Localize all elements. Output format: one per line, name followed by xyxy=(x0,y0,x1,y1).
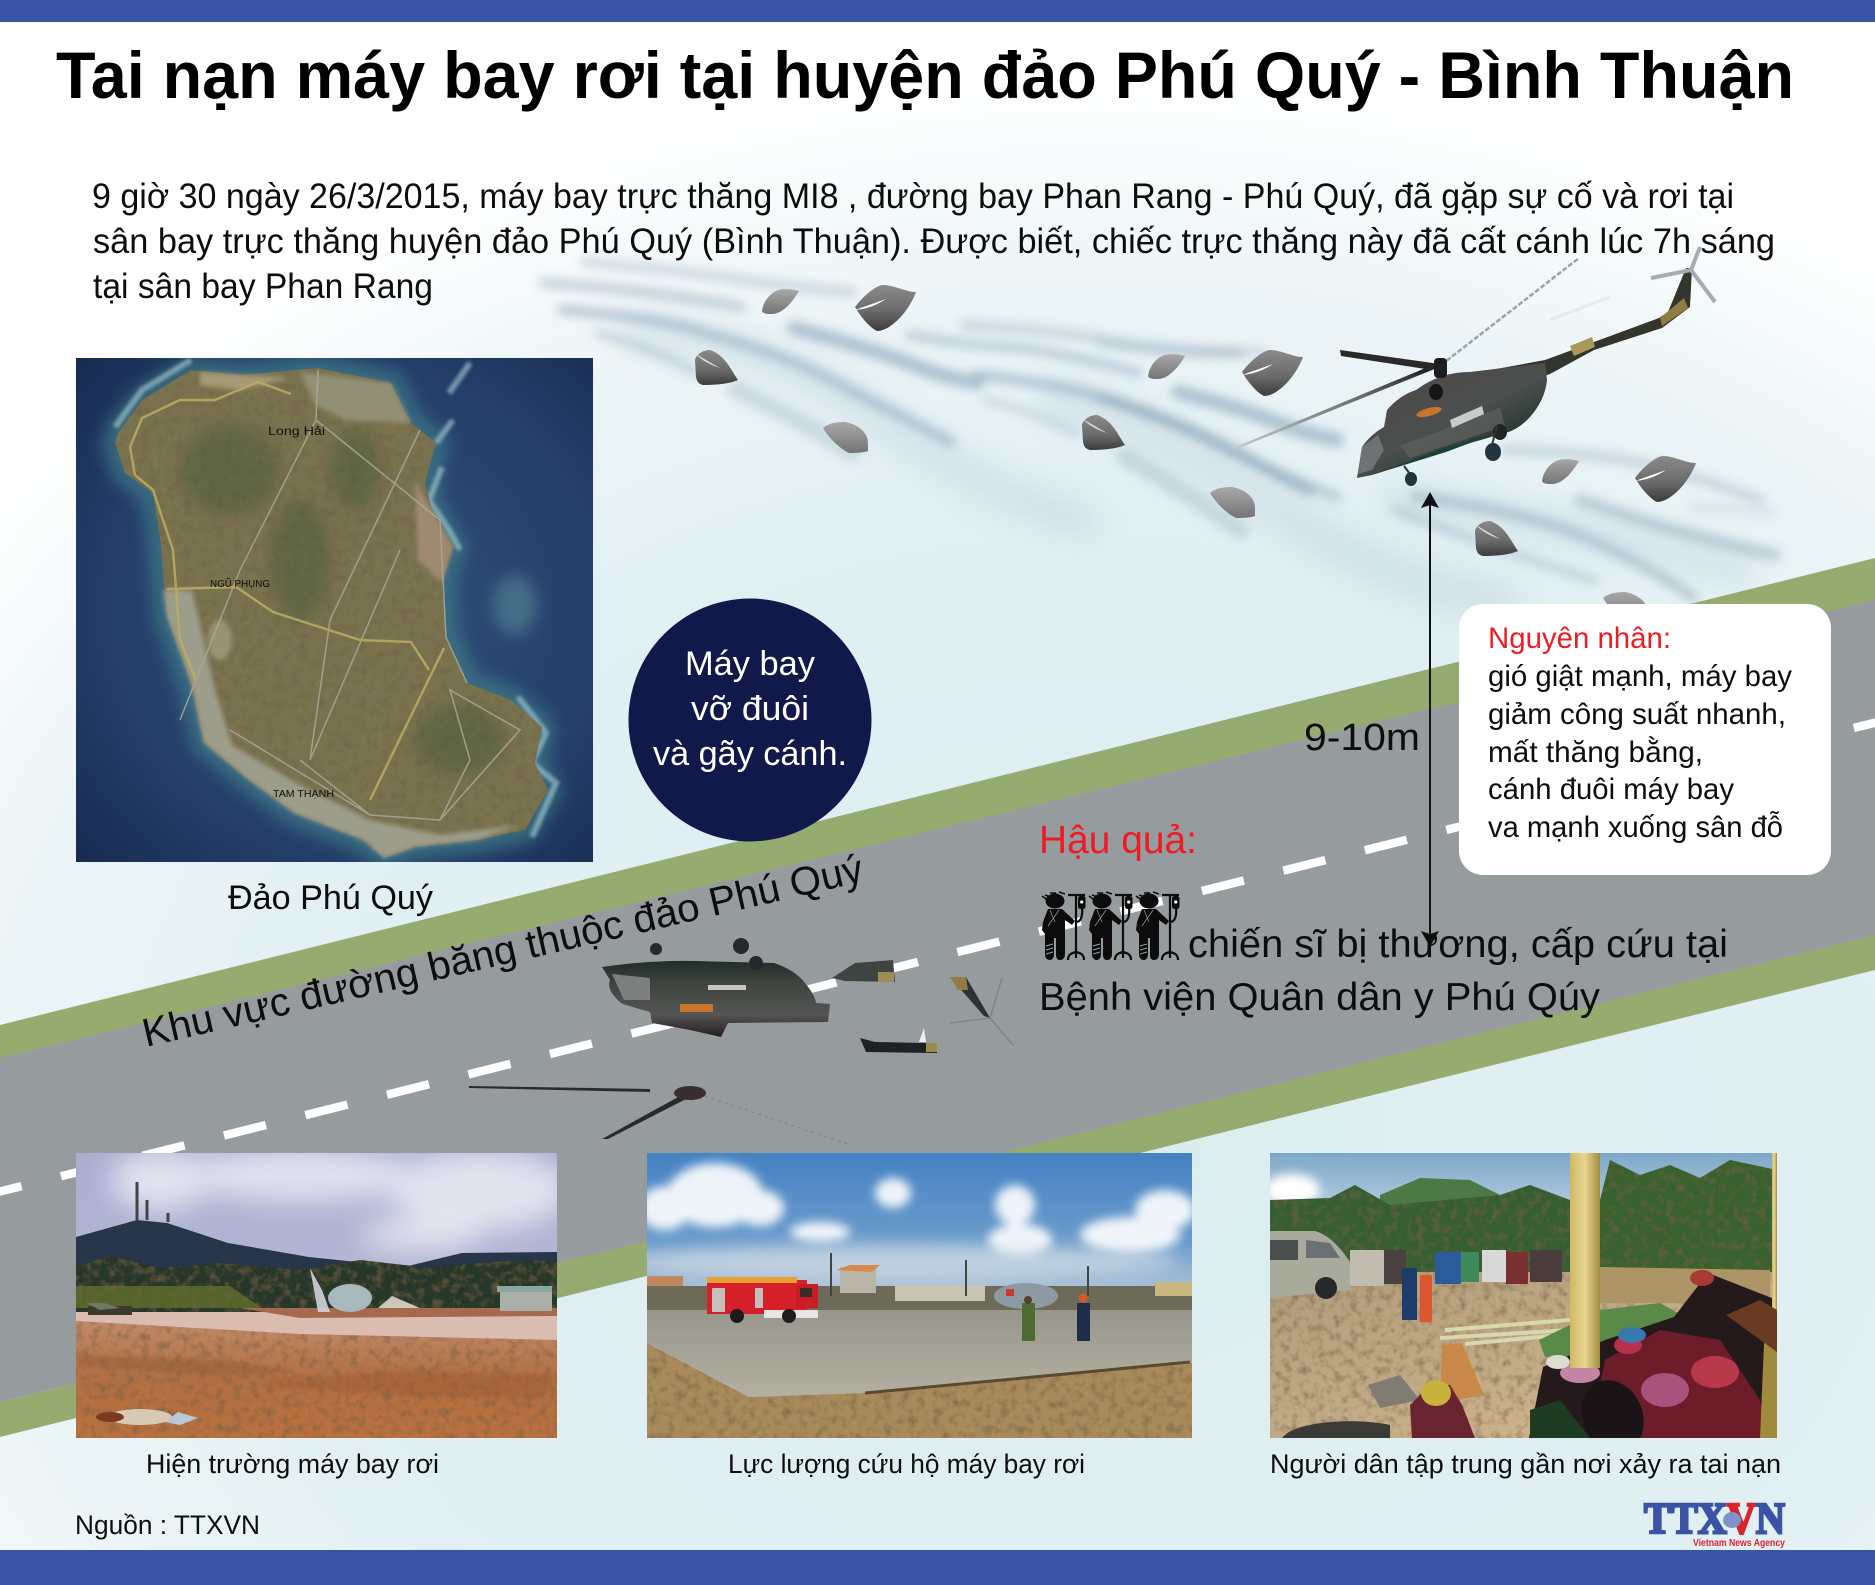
rotor hub xyxy=(1434,358,1447,378)
callout: cause: va mạnh xuống sân đỗ xyxy=(1488,811,1783,844)
callout: cause xyxy=(1459,604,1831,875)
shed xyxy=(500,1290,552,1311)
wreck body xyxy=(602,961,830,1037)
orange emblem xyxy=(1415,405,1443,419)
bottom bar xyxy=(0,1550,1875,1585)
helicopter on apron xyxy=(994,1283,1058,1309)
bench rail xyxy=(1726,1300,1777,1352)
title: Tai nạn máy bay rơi tại huyện đảo Phú Quý - Bình Thuận xyxy=(56,38,1794,112)
green lower verge xyxy=(0,935,1875,1437)
callout: cause: cánh đuôi máy bay xyxy=(1488,773,1734,806)
seated crowd xyxy=(1529,1273,1777,1438)
soft haze under streaks xyxy=(640,330,1740,600)
tree line xyxy=(76,1256,557,1312)
callout: cause: Nguyên nhân: xyxy=(1488,622,1671,655)
parked helicopter xyxy=(88,1306,132,1315)
height label: 9-10m xyxy=(1304,717,1420,759)
yellow pillars xyxy=(1570,1153,1600,1368)
radio tower xyxy=(137,1182,168,1222)
orange emblem xyxy=(680,1004,713,1012)
dry ground xyxy=(647,1343,1192,1438)
place names xyxy=(210,424,334,800)
callout: damage circle: vỡ đuôi xyxy=(691,690,809,728)
callout: cause: giảm công suất nhanh, xyxy=(1488,698,1786,731)
consequences text: chiến sĩ bị thương, cấp cứu tại xyxy=(1188,923,1728,966)
clouds xyxy=(110,1149,570,1250)
broken main rotor xyxy=(469,1086,650,1092)
darker vegetation patches xyxy=(180,425,505,775)
surf foam xyxy=(115,360,556,837)
map caption: Đảo Phú Quý xyxy=(228,879,433,917)
soil xyxy=(76,1321,557,1438)
ambulance van xyxy=(1270,1231,1350,1298)
callout: cause: gió giật mạnh, máy bay xyxy=(1488,660,1792,693)
utility poles xyxy=(831,1253,1088,1296)
intro text: tại sân bay Phan Rang xyxy=(93,267,433,306)
nose glazing xyxy=(1358,435,1384,474)
place names: Long Hải xyxy=(268,424,325,438)
hill and trees xyxy=(1380,1178,1500,1205)
bamboo piles xyxy=(1440,1320,1570,1344)
intro text: sân bay trực thăng huyện đảo Phú Quý (Bình Thuận). Được biết, chiếc trực thăng này đã cất cánh lúc 7h sáng xyxy=(93,222,1775,261)
grey runway surface xyxy=(0,600,1875,1402)
helicopter in flight xyxy=(1233,247,1715,486)
callout: damage circle: Máy bay xyxy=(685,645,815,683)
concrete apron xyxy=(647,1310,1192,1397)
place names: NGŨ PHỤNG xyxy=(210,577,270,590)
yellow-helmet spectator xyxy=(1410,1385,1475,1438)
rescue workers xyxy=(1022,1303,1035,1341)
hill xyxy=(76,1220,557,1270)
second tail fragment xyxy=(860,1038,937,1053)
pale coast towns xyxy=(163,372,520,858)
top bar xyxy=(0,0,1875,22)
photo: rescue forces xyxy=(620,1153,1195,1438)
intro text xyxy=(92,177,1775,306)
wreck xyxy=(328,1284,372,1312)
height arrow xyxy=(1421,492,1439,947)
runway area label: Khu vực đường băng thuộc đảo Phú Quý xyxy=(138,847,867,1056)
island roads xyxy=(130,370,520,820)
tail boom and fin xyxy=(1480,268,1692,388)
wrecked helicopter xyxy=(469,938,1013,1145)
island land xyxy=(115,368,548,858)
TTXVN logo: TTXVN xyxy=(1644,1494,1785,1543)
horizon buildings xyxy=(647,1286,1192,1310)
fuselage xyxy=(1357,363,1547,478)
wheelbarrow and bin xyxy=(1368,1375,1420,1408)
shallow water halo xyxy=(115,368,548,858)
consequences text: Bệnh viện Quân dân y Phú Qúy xyxy=(1039,976,1600,1019)
place names: TAM THẠNH xyxy=(273,789,334,800)
tail boom fragment xyxy=(832,960,895,982)
photo caption: Hiện trường máy bay rơi xyxy=(146,1449,439,1479)
wreck wheels xyxy=(650,943,662,955)
fire truck xyxy=(707,1280,807,1314)
foreground debris xyxy=(108,1409,172,1425)
streak lines xyxy=(544,262,1775,597)
tail rotor xyxy=(1651,247,1715,302)
ocean xyxy=(76,358,593,862)
photo: onlookers xyxy=(1264,1153,1777,1438)
two walkers xyxy=(1402,1268,1417,1320)
runway surface xyxy=(76,1312,557,1340)
runway band xyxy=(0,558,1875,1437)
green upper verge xyxy=(0,558,1875,1060)
callout: cause: mất thăng bằng, xyxy=(1488,736,1703,769)
callout: damage circle xyxy=(628,598,872,842)
wheels xyxy=(1485,443,1501,461)
dry ground xyxy=(1270,1272,1777,1438)
crowd in distance xyxy=(1350,1250,1562,1286)
consequences text xyxy=(1039,923,1728,1019)
long rotor blades xyxy=(1233,362,1442,450)
icons: injured soldiers xyxy=(1042,892,1180,960)
smoke xyxy=(310,1268,330,1312)
map panel xyxy=(76,358,593,862)
source: Nguồn : TTXVN xyxy=(75,1510,260,1540)
falling leaves xyxy=(695,285,1696,623)
brick stack xyxy=(1440,1343,1484,1403)
photo: crash scene xyxy=(76,1149,570,1438)
wind streaks xyxy=(544,262,1775,600)
broken tail fin and rotor xyxy=(950,977,990,1018)
consequences heading: Hậu quả: xyxy=(1039,819,1197,862)
photo caption: Lực lượng cứu hộ máy bay rơi xyxy=(728,1449,1085,1479)
intro text: 9 giờ 30 ngày 26/3/2015, máy bay trực thăng MI8 , đường bay Phan Rang - Phú Quý, đã gặp sự cố và rơi tại xyxy=(92,177,1734,216)
TTXVN logo: Vietnam News Agency xyxy=(1693,1537,1785,1549)
photo caption: Người dân tập trung gần nơi xảy ra tai nạn xyxy=(1270,1449,1781,1479)
callout: damage circle: và gãy cánh. xyxy=(653,735,847,773)
clouds xyxy=(639,1163,1195,1256)
low haze xyxy=(620,1244,1180,1280)
runway centre dashes xyxy=(0,716,1875,1197)
reef glow xyxy=(493,575,537,635)
